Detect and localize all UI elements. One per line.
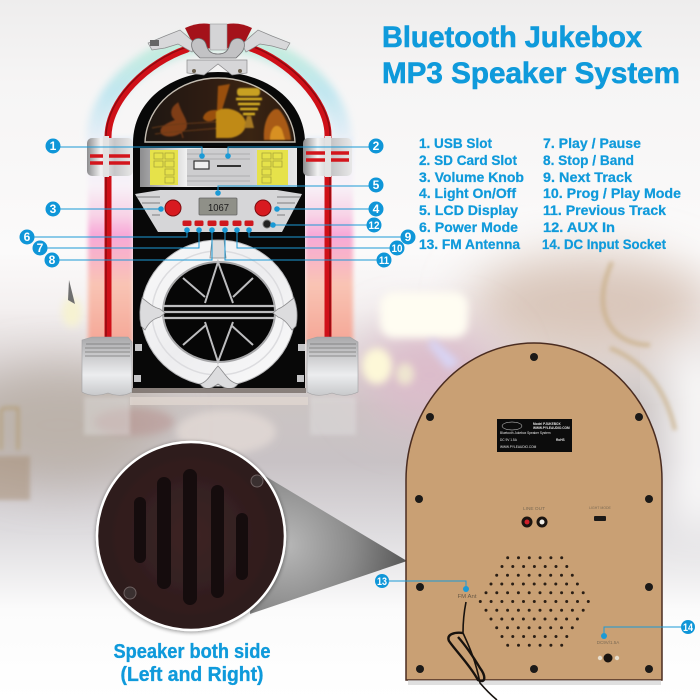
speaker grille ring — [140, 240, 297, 389]
chrome ornaments — [140, 240, 297, 389]
black cabinet — [133, 72, 305, 388]
callout 14 — [601, 620, 695, 639]
jukebox front view — [82, 24, 358, 454]
floor reflection — [84, 388, 356, 454]
marker numbers: 2 — [373, 139, 380, 153]
feature list, column one: 5. LCD Display — [419, 202, 518, 218]
title: Bluetooth Jukebox — [382, 21, 642, 54]
cabinet screws — [134, 344, 305, 382]
callout 14: 14 — [683, 622, 694, 634]
speaker slots — [134, 469, 248, 605]
control panel with wings — [135, 190, 302, 232]
jukebox back panel — [406, 343, 662, 700]
title — [382, 21, 680, 90]
feature list, column one: 4. Light On/Off — [419, 185, 516, 201]
side light columns — [88, 137, 353, 342]
FM antenna wire: FM Ant — [458, 594, 477, 600]
rating label: RoHS — [556, 438, 565, 442]
speaker caption — [114, 641, 270, 686]
rating label: DC 9V 1.5A — [500, 438, 518, 442]
feature list, column two: 10. Prog / Play Mode — [543, 185, 681, 201]
feature list, column two — [542, 135, 681, 252]
marker numbers: 3 — [50, 202, 57, 216]
light mode switch: LIGHT MODE — [589, 506, 612, 510]
line out RCA jacks: LINE OUT — [523, 506, 545, 511]
marker numbers: 4 — [373, 202, 380, 216]
screws — [124, 475, 263, 599]
top chrome crest — [148, 24, 290, 75]
volume knob — [165, 200, 181, 216]
feature list, column two: 12. AUX In — [543, 219, 615, 235]
marker numbers: 12 — [368, 220, 380, 232]
rating label: WWW.PYLEAUDIO.COM — [533, 426, 570, 430]
FM antenna wire — [448, 594, 497, 700]
DC input socket: DC9V/1.5A — [597, 640, 619, 645]
light mode switch — [589, 506, 612, 521]
rating label — [497, 419, 572, 452]
marker numbers: 5 — [373, 178, 380, 192]
dome window with music artwork — [145, 78, 295, 142]
rating label: Bluetooth Jukebox Speaker System — [500, 431, 551, 435]
feature list, column two: 8. Stop / Band — [543, 152, 634, 168]
feature list, column one — [419, 135, 524, 252]
feature list, column one: 6. Power Mode — [419, 219, 518, 235]
marker circles — [20, 138, 416, 268]
feature list, column two: 11. Previous Track — [543, 202, 666, 218]
marker numbers: 11 — [379, 255, 389, 267]
callout 13: 13 — [377, 576, 387, 588]
feature list, column two: 14. DC Input Socket — [542, 236, 666, 252]
DC input socket — [597, 640, 619, 662]
title: MP3 Speaker System — [382, 57, 680, 90]
rating label: WWW.PYLEAUDIO.COM — [500, 445, 537, 449]
speaker perforation — [480, 558, 590, 645]
line out RCA jacks — [522, 506, 548, 528]
marker numbers: 9 — [405, 230, 412, 244]
feature list, column two: 7. Play / Pause — [543, 135, 641, 151]
LCD display: 1067 — [208, 202, 229, 214]
feature list, column one: 1. USB Slot — [419, 135, 492, 151]
upper silver panel with USB and SD slots — [140, 148, 297, 187]
marker numbers: 10 — [392, 243, 402, 255]
marker numbers: 1 — [50, 139, 57, 153]
rating label: Model PJUKEBOX — [533, 422, 562, 426]
right chrome collar — [303, 136, 352, 177]
feature list, column two: 9. Next Track — [543, 169, 632, 185]
red neon tubes — [106, 45, 330, 337]
callout 13 — [375, 574, 469, 592]
numbered callouts on the jukebox — [20, 138, 416, 268]
feature list, column one: 13. FM Antenna — [419, 236, 520, 252]
red push buttons — [182, 220, 254, 226]
marker numbers: 8 — [49, 253, 56, 267]
speaker caption: (Left and Right) — [120, 664, 264, 686]
light on/off knob — [255, 200, 271, 216]
speaker caption: Speaker both side — [114, 641, 270, 663]
aux jack — [263, 220, 271, 228]
screws — [415, 353, 653, 673]
leader lines — [27, 147, 408, 260]
chrome feet — [82, 337, 358, 395]
left chrome collar — [87, 136, 133, 177]
marker numbers: 6 — [24, 230, 31, 244]
LCD display — [199, 198, 237, 215]
leader dots — [158, 153, 280, 233]
feature list, column one: 3. Volume Knob — [419, 169, 524, 185]
zoom cone from speaker detail to back panel — [250, 470, 407, 614]
speaker detail circle — [97, 442, 285, 630]
marker numbers — [24, 139, 412, 267]
rainbow light glow around the arch — [96, 40, 342, 140]
feature list, column one: 2. SD Card Slot — [419, 152, 517, 168]
marker numbers: 7 — [37, 241, 44, 255]
